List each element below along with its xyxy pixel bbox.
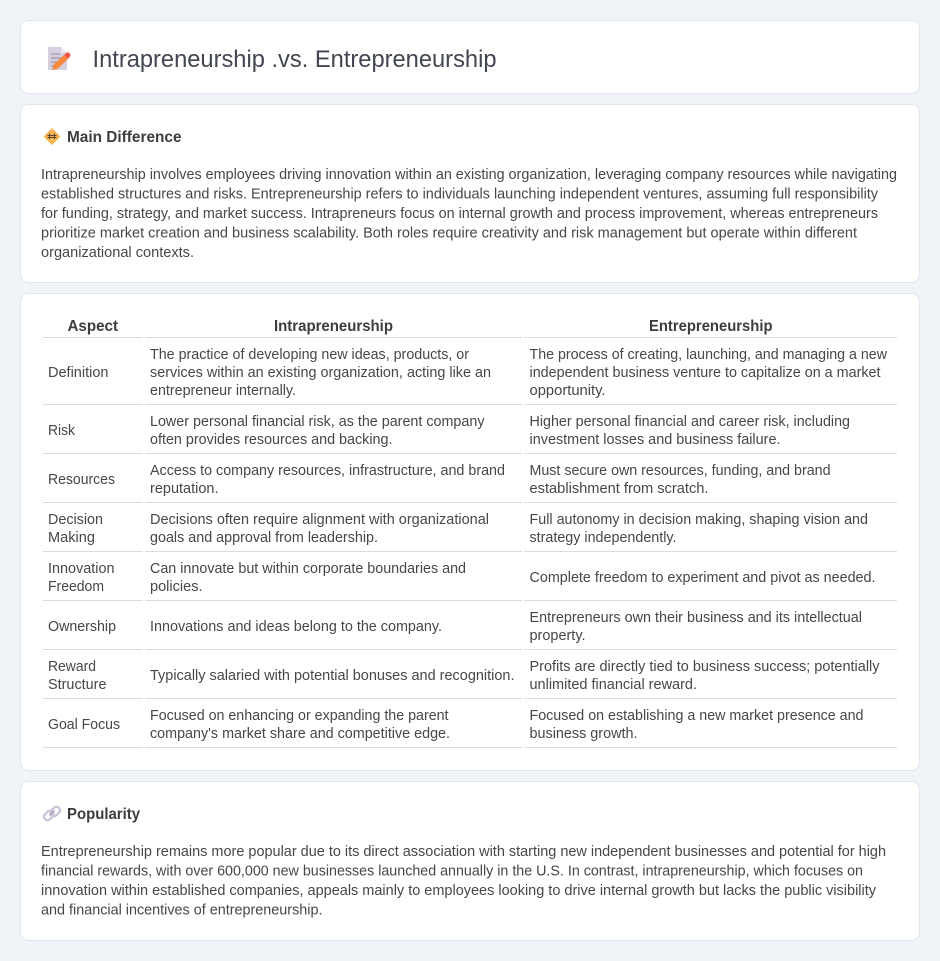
table row: decision making: Full autonomy in decision making, shaping vision and (530, 512, 868, 528)
table row: goal focus (43, 708, 897, 748)
table row: innovation freedom (43, 561, 897, 601)
title: Intrapreneurship .vs. Entrepreneurship (92, 46, 496, 73)
table row: ownership (43, 610, 897, 650)
table row: reward structure: Profits are directly tied to business success; potentially (530, 659, 880, 675)
text block: main difference: for funding, strategy, and market success. Intrapreneurs focus on internal growth and process improvement, whereas entrepreneurs (41, 206, 878, 222)
table row: definition: entrepreneur internally. (150, 383, 296, 399)
table row: reward structure: Typically salaried with potential bonuses and recognition. (150, 668, 514, 684)
table row: definition: Definition (48, 365, 108, 381)
table row: innovation freedom: Complete freedom to experiment and pivot as needed. (530, 570, 876, 586)
table row: risk: Lower personal financial risk, as the parent company (150, 414, 485, 430)
table row: risk: Risk (48, 423, 76, 439)
table row: definition: opportunity. (530, 383, 606, 399)
table row: reward structure (43, 659, 897, 699)
table row: reward structure: Structure (48, 677, 106, 693)
table header row: Intrapreneurship (274, 318, 393, 335)
table row: goal focus: company's market share and competitive edge. (150, 726, 450, 742)
text block: main difference: Intrapreneurship involves employees driving innovation within an existing organization, leveraging company resources while navigating (41, 167, 897, 183)
icon: document with pencil (48, 47, 70, 70)
text block: popularity: and financial incentives of entrepreneurship. (41, 902, 322, 918)
text block: main difference (41, 167, 897, 261)
table row: reward structure: unlimited financial reward. (530, 677, 697, 693)
table row: ownership: Ownership (48, 619, 116, 635)
table row: risk: investment losses and business failure. (530, 432, 780, 448)
text block: popularity: financial rewards, with over 600,000 new businesses launched annually in the U.S. In contrast, intrapreneurship, which focuses on (41, 864, 863, 880)
table row: innovation freedom: Innovation (48, 561, 114, 577)
table header row: Entrepreneurship (649, 318, 773, 335)
text block: popularity: innovation within established companies, appeals mainly to employees looking to drive internal growth but lacks the public visibility (41, 883, 877, 899)
table row: decision making: Decision (48, 512, 103, 528)
text block: main difference: established structures and risks. Entrepreneurship refers to individuals launching independent ventures, assuming full responsibility (41, 186, 879, 202)
table row: risk (43, 414, 897, 454)
table row: resources: reputation. (150, 481, 218, 497)
icon: chain link (43, 805, 61, 822)
panel: popularity (20, 782, 920, 940)
table row: decision making: Decisions often require alignment with organizational (150, 512, 489, 528)
text block: popularity (41, 844, 886, 918)
table row: definition: The process of creating, launching, and managing a new (530, 347, 888, 363)
text block: main difference: organizational contexts. (41, 245, 194, 261)
table row: innovation freedom: Can innovate but within corporate boundaries and (150, 561, 466, 577)
table row: resources: Must secure own resources, funding, and brand (530, 463, 830, 479)
heading: main difference: Main Difference (67, 129, 182, 146)
panel: main difference (20, 104, 920, 282)
panel: title header (20, 20, 920, 94)
table row: resources: Access to company resources, infrastructure, and brand (150, 463, 505, 479)
table row: ownership: Entrepreneurs own their business and its intellectual (530, 610, 862, 626)
heading: popularity: Popularity (67, 806, 140, 823)
table row: resources: establishment from scratch. (530, 481, 708, 497)
table header row (43, 318, 897, 338)
table row: innovation freedom: Freedom (48, 579, 104, 595)
icon: warning diamond (44, 128, 60, 145)
table row: goal focus: Focused on enhancing or expanding the parent (150, 708, 448, 724)
table row: definition: independent business venture to capitalize on a market (530, 365, 880, 381)
table row: goal focus: Goal Focus (48, 717, 120, 733)
table row: ownership: Innovations and ideas belong to the company. (150, 619, 442, 635)
table row: decision making: Making (48, 530, 95, 546)
table row: ownership: property. (530, 628, 586, 644)
panel: comparison table (20, 294, 920, 770)
table row: reward structure: Reward (48, 659, 96, 675)
table row: decision making: strategy independently. (530, 530, 676, 546)
table row: definition: The practice of developing new ideas, products, or (150, 347, 469, 363)
table row: resources: Resources (48, 472, 115, 488)
table row: resources (43, 463, 897, 503)
text block: main difference: prioritize market creation and business scalability. Both roles require creativity and risk management but operate within different (41, 226, 857, 242)
table row: goal focus: business growth. (530, 726, 638, 742)
text block: popularity: Entrepreneurship remains more popular due to its direct association with starting new independent businesses and potential for high (41, 844, 886, 860)
table row: goal focus: Focused on establishing a new market presence and (530, 708, 864, 724)
table row: decision making (43, 512, 897, 552)
table row: innovation freedom: policies. (150, 579, 202, 595)
table row: definition (43, 347, 897, 405)
table row: definition: services within an existing organization, acting like an (150, 365, 491, 381)
table row: risk: Higher personal financial and career risk, including (530, 414, 850, 430)
table header row: Aspect (68, 318, 119, 335)
table row: risk: often provides resources and backing. (150, 432, 392, 448)
table row: decision making: goals and approval from leadership. (150, 530, 378, 546)
